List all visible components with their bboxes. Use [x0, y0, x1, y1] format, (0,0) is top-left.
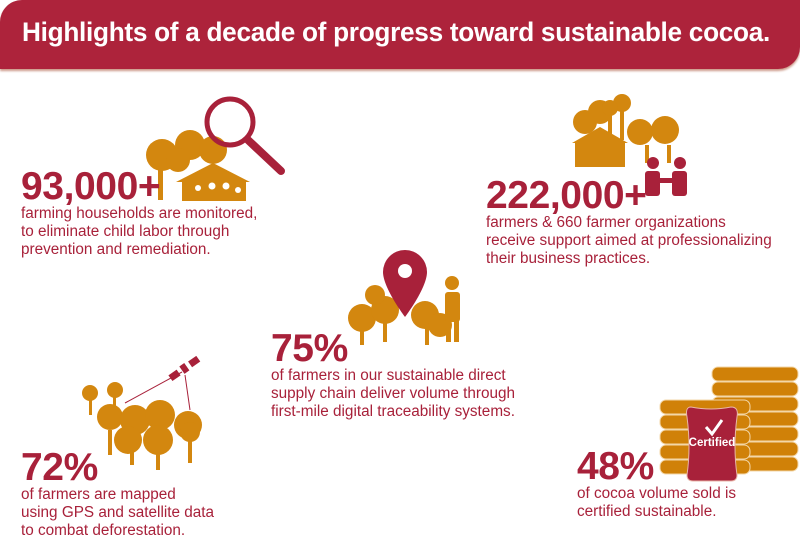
stat: 222,000+ farmers: 222,000+ — [486, 174, 647, 217]
stat: 93,000+ households: prevention and remediation. — [21, 241, 211, 258]
icon: house with family and magnifier — [146, 99, 281, 201]
stat: 75% traceability: 75% — [271, 327, 348, 370]
stat: 222,000+ farmers — [486, 174, 772, 267]
icon: satellite over forest — [82, 355, 202, 470]
stat: 48% certified: 48% — [577, 445, 654, 488]
icon: sacks with Certified bag: Certified — [689, 437, 735, 449]
title banner — [0, 0, 800, 69]
stat: 222,000+ farmers: receive support aimed at professionalizing — [486, 232, 772, 249]
stat: 93,000+ households: farming households are monitored, — [21, 205, 257, 222]
icon: sacks with Certified bag — [660, 367, 798, 481]
stat: 93,000+ households — [21, 165, 257, 258]
stat: 72% mapped: of farmers are mapped — [21, 486, 176, 503]
stat: 72% mapped — [21, 446, 214, 539]
stat: 72% mapped: 72% — [21, 446, 98, 489]
stat: 222,000+ farmers: farmers & 660 farmer organizations — [486, 214, 726, 231]
stat: 72% mapped: to combat deforestation. — [21, 522, 185, 539]
stat: 48% certified: certified sustainable. — [577, 503, 716, 520]
stat: 75% traceability: of farmers in our sustainable direct — [271, 367, 506, 384]
stat: 222,000+ farmers: their business practices. — [486, 250, 650, 267]
stat: 48% certified: of cocoa volume sold is — [577, 485, 736, 502]
stat: 75% traceability: supply chain deliver volume through — [271, 385, 515, 402]
icon: farm hut and handshake — [572, 94, 679, 167]
stat: 75% traceability: first-mile digital traceability systems. — [271, 403, 515, 420]
stat: 75% traceability — [271, 327, 515, 420]
icon: location pin with trees and farmer — [348, 250, 460, 345]
title banner: Highlights of a decade of progress toward sustainable cocoa. — [22, 17, 770, 47]
stat: 72% mapped: using GPS and satellite data — [21, 504, 214, 521]
stat: 93,000+ households: 93,000+ — [21, 165, 160, 208]
stat: 48% certified — [577, 445, 736, 520]
stat: 93,000+ households: to eliminate child labor through — [21, 223, 229, 240]
